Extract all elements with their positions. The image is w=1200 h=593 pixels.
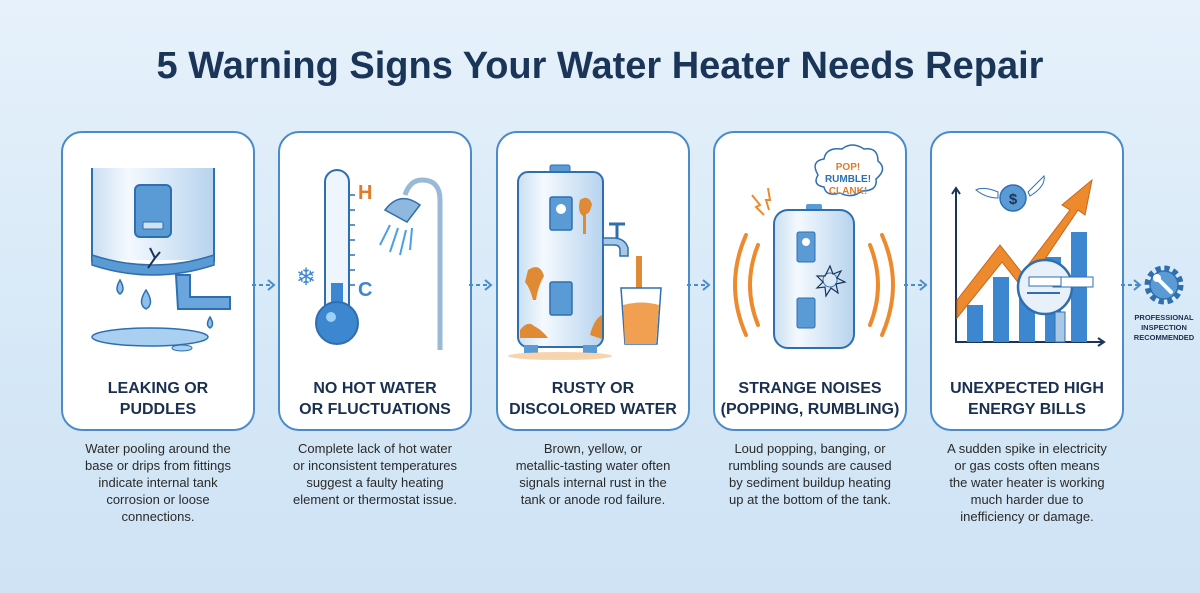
text: bills description: inefficiency or damage.: [960, 509, 1094, 524]
label: noises: (POPPING, RUMBLING): [721, 401, 899, 418]
arrow 1: [252, 280, 274, 290]
text: rusty description: Brown, yellow, or: [544, 441, 643, 456]
icon: noisy tank: CLANK!: [829, 186, 867, 197]
label: no hot water: OR FLUCTUATIONS: [299, 401, 451, 418]
text: noises description: [728, 441, 892, 507]
icon: thermometer and shower: [296, 170, 440, 350]
text: bills description: much harder due to: [971, 492, 1083, 507]
callout: professional inspection: INSPECTION: [1141, 323, 1187, 332]
text: leaking description: corrosion or loose: [106, 492, 210, 507]
label: leaking: PUDDLES: [120, 401, 197, 418]
label: bills: [950, 380, 1104, 418]
callout: professional inspection: PROFESSIONAL: [1134, 313, 1194, 322]
text: no hot water description: suggest a faulty heating: [306, 475, 444, 490]
text: rusty description: tank or anode rod failure.: [521, 492, 665, 507]
text: leaking description: base or drips from fittings: [85, 458, 231, 473]
text: rusty description: signals internal rust in the: [519, 475, 667, 490]
text: noises description: by sediment buildup heating: [729, 475, 891, 490]
text: no hot water description: Complete lack of hot water: [298, 441, 453, 456]
arrow 5: [1121, 280, 1140, 290]
arrow 2: [469, 280, 491, 290]
label: bills: ENERGY BILLS: [968, 401, 1086, 418]
panel: strange noises: [714, 132, 906, 430]
icon: rising bills chart: [952, 176, 1104, 346]
text: bills description: or gas costs often means: [954, 458, 1100, 473]
label: no hot water: NO HOT WATER: [313, 380, 437, 397]
text: leaking description: indicate internal tank: [98, 475, 218, 490]
text: rusty description: [516, 441, 670, 507]
icon: thermometer and shower: H: [358, 182, 372, 204]
text: bills description: [947, 441, 1107, 524]
title: 5 Warning Signs Your Water Heater Needs Repair: [157, 45, 1044, 87]
label: leaking: [108, 380, 209, 418]
text: noises description: rumbling sounds are caused: [728, 458, 892, 473]
text: no hot water description: [293, 441, 458, 507]
arrow 3: [687, 280, 709, 290]
callout: professional inspection: [1134, 313, 1195, 342]
panel: rusty water: [497, 132, 689, 430]
text: leaking description: Water pooling around the: [85, 441, 231, 456]
icon: rising bills chart: $: [1009, 191, 1018, 208]
callout: professional inspection: RECOMMENDED: [1134, 333, 1195, 342]
label: leaking: LEAKING OR: [108, 380, 209, 397]
panel: no hot water: [279, 132, 471, 430]
text: rusty description: metallic-tasting water often: [516, 458, 670, 473]
text: leaking description: [85, 441, 231, 524]
text: noises description: Loud popping, banging, or: [734, 441, 886, 456]
label: rusty: [509, 380, 677, 418]
icon: gear wrench: [1148, 269, 1180, 301]
text: leaking description: connections.: [122, 509, 194, 524]
icon: rusty tank: [508, 165, 661, 360]
text: no hot water description: element or thermostat issue.: [293, 492, 457, 507]
text: bills description: the water heater is working: [949, 475, 1105, 490]
text: noises description: up at the bottom of the tank.: [729, 492, 891, 507]
label: noises: [721, 380, 899, 418]
label: noises: STRANGE NOISES: [738, 380, 882, 397]
icon: thermometer and shower: C: [358, 279, 372, 301]
icon: leaking tank: [92, 168, 230, 351]
label: rusty: DISCOLORED WATER: [509, 401, 677, 418]
icon: noisy tank: [735, 145, 893, 348]
icon: noisy tank: POP!: [836, 162, 860, 173]
label: bills: UNEXPECTED HIGH: [950, 380, 1104, 397]
icon: noisy tank: RUMBLE!: [825, 174, 871, 185]
label: no hot water: [299, 380, 451, 418]
arrow 4: [904, 280, 926, 290]
label: rusty: RUSTY OR: [552, 380, 635, 397]
text: bills description: A sudden spike in electricity: [947, 441, 1107, 456]
panel: energy bills: [931, 132, 1123, 430]
text: no hot water description: or inconsistent temperatures: [293, 458, 458, 473]
panel: leaking: [62, 132, 254, 430]
icon: thermometer and shower: ❄: [296, 264, 316, 291]
